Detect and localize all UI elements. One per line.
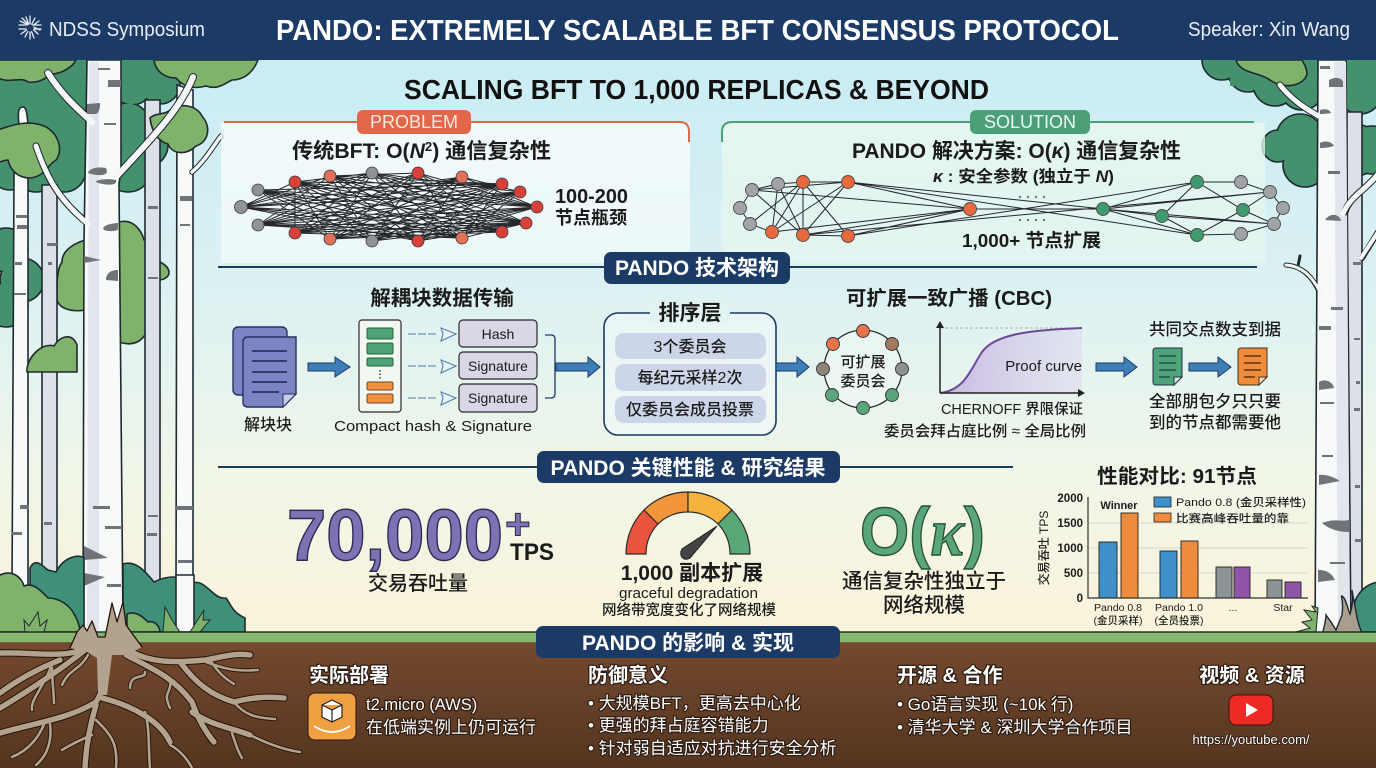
bar chart: performance comparison: 0 [1077,593,1083,605]
dashed arrows [408,328,456,405]
ordering heading: 排序层 [658,302,722,325]
hash and signature boxes: Hash [482,326,514,342]
header: speaker: Speaker: Xin Wang [1188,19,1350,41]
metric: 70,000+ TPS: 70,000 [287,496,503,576]
icon: YouTube [1229,695,1273,725]
icon: AWS box [308,693,356,740]
block: deployment: 实际部署 [309,663,389,687]
chernoff label: CHERNOFF 界限保证 [941,401,1083,418]
bar chart: performance comparison: (金贝采样) [1094,614,1142,627]
ordering items: 每纪元采样2次 [638,369,742,387]
block: defense: • 更强的拜占庭容错能力 [588,716,769,735]
section divider: results: PANDO 关键性能 & 研究结果 [551,456,825,480]
block: open source: 开源 & 合作 [897,664,1003,687]
hash and signature boxes: Signature [468,390,528,406]
bar chart: performance comparison: (全员投票) [1154,614,1204,627]
scaling label: 1,000+ 节点扩展 [962,230,1101,251]
gauge labels: 网络带宽度变化了网络规模 [602,601,776,619]
block: deployment: t2.micro (AWS) [366,696,477,714]
bracket [545,335,555,398]
icon: green document [1153,348,1182,385]
ordering items: 仅委员会成员投票 [626,401,754,419]
problem heading: ) 通信复杂性 [432,140,551,163]
chart: proof curve [936,321,1085,397]
block: defense: • 针对弱自适应对抗进行安全分析 [588,739,837,758]
gauge labels: graceful degradation [619,586,758,602]
metric: O(kappa): O(κ) [860,494,985,570]
kappa note: κ : 安全参数 (独立于 N) [933,166,1114,186]
metric: 70,000+ TPS: 交易吞吐量 [368,572,468,595]
legend: Pando 0.8 (金贝采样性) [1176,495,1306,509]
chart title: 性能对比: 91节点 [1097,465,1257,488]
metric: O(kappa): 通信复杂性独立于 [842,570,1006,593]
bar chart: performance comparison: Star [1273,602,1293,614]
heading: decoupled block transfer: 解耦块数据传输 [370,287,514,310]
bottleneck label: 节点瓶颈 [555,208,627,228]
metric: 70,000+ TPS: + [505,500,531,549]
solution heading: PANDO 解决方案: O(κ) 通信复杂性 [852,139,1181,163]
block: video: https://youtube.com/ [1192,732,1310,747]
block: defense: 防御意义 [588,663,668,687]
legend [1154,495,1306,525]
icon: block documents [233,327,296,407]
arrow [1096,357,1137,377]
legend: 比赛高峰吞吐量的靠 [1176,511,1289,525]
block: open source: • Go语言实现 (~10k 行) [897,695,1073,714]
metric: O(kappa) [842,494,1006,617]
bar chart: performance comparison: 1000 [1057,543,1083,555]
icon: orange document [1238,348,1267,385]
metric: 70,000+ TPS: TPS [510,539,554,566]
label: block: 解块块 [244,416,292,434]
hash and signature boxes [459,320,537,412]
heading: common data: 共同交点数支到据 [1149,319,1281,339]
section banner: impact [536,626,840,658]
committee ring [816,324,908,414]
ground grass and soil [0,632,1376,768]
hash and signature boxes: Signature [468,358,528,374]
bar chart: performance comparison: ... [1229,602,1237,614]
compact block column [359,320,401,412]
main birch trunk with branches [36,60,193,640]
metric: O(kappa): 网络规模 [883,593,965,617]
label: compact hash and signature: Compact hash & Signature [334,418,532,435]
left forest [0,60,258,640]
solution badge [970,110,1090,134]
data availability note: 全部朋包夕只只要 [1149,391,1281,411]
block: video: 视频 & 资源 [1199,664,1305,687]
problem heading: 2 [425,139,432,154]
bar chart: performance comparison: Winner [1100,500,1138,512]
solution badge: SOLUTION [984,112,1076,132]
block: deployment: 在低端实例上仍可运行 [366,718,536,737]
arrow [776,357,809,377]
committee ring: 委员会 [840,373,886,390]
header: main title: PANDO: EXTREMELY SCALABLE BFT CONSENSUS PROTOCOL [276,15,1119,47]
background sky [0,60,1376,635]
block: defense [588,663,837,758]
heading: CBC: 可扩展一致广播 (CBC) [846,287,1052,310]
problem badge: PROBLEM [370,112,458,132]
chart: proof curve: Proof curve [1005,358,1082,375]
bottleneck label: 100-200 [555,186,628,208]
bushes and grass tufts left [30,556,245,632]
block: open source: • 清华大学 & 深圳大学合作项目 [897,718,1132,737]
full mesh network diagram [234,167,543,247]
icon: NDSS logo [19,16,41,39]
bar chart: performance comparison: 500 [1064,568,1083,580]
panel: solution [722,110,1290,263]
header: symposium name: NDSS Symposium [49,19,205,41]
committee ratio note: 委员会拜占庭比例 ≈ 全局比例 [884,422,1086,440]
committee sampling network diagram [734,176,1290,242]
section divider: architecture: PANDO 技术架构 [615,257,779,280]
bar chart: performance comparison: Pando 0.8 [1094,602,1142,614]
gauge labels [602,562,776,619]
section divider: architecture [218,252,1257,284]
bar chart: performance comparison: Pando 1.0 [1155,602,1203,614]
block: deployment [308,663,536,740]
heading: scaling BFT: SCALING BFT TO 1,000 REPLICAS & BEYOND [404,74,989,105]
section divider: results [218,451,1013,483]
block: defense: • 大规模BFT，更高去中心化 [588,694,801,713]
block: open source [897,664,1132,737]
ordering items [615,333,766,423]
block: video [1192,664,1310,747]
gauge [626,492,750,559]
panel: problem [221,110,690,263]
bar chart: performance comparison: 2000 [1057,493,1083,505]
panel: ordering layer [604,302,776,435]
tree roots [0,602,300,768]
data availability note: 到的节点都需要他 [1149,413,1281,432]
right forest [1202,40,1376,640]
arrow [556,357,600,377]
metric: 70,000+ TPS [287,496,554,595]
bar chart: performance comparison [1036,465,1308,627]
bar chart: performance comparison: 1500 [1057,518,1083,530]
bottleneck label [555,186,628,228]
data availability note [1149,391,1281,432]
arrow [308,357,350,377]
problem badge [357,110,471,134]
ordering items: 3个委员会 [654,338,726,356]
gauge labels: 1,000 副本扩展 [621,562,763,585]
problem heading: 传统BFT: O(N [292,140,425,163]
bar chart: performance comparison: 交易吞吐 TPS [1036,511,1051,585]
arrow [1189,357,1231,377]
top header bar [0,0,1376,60]
committee ring: 可扩展 [840,354,886,371]
section banner: impact: PANDO 的影响 & 实现 [582,631,794,655]
